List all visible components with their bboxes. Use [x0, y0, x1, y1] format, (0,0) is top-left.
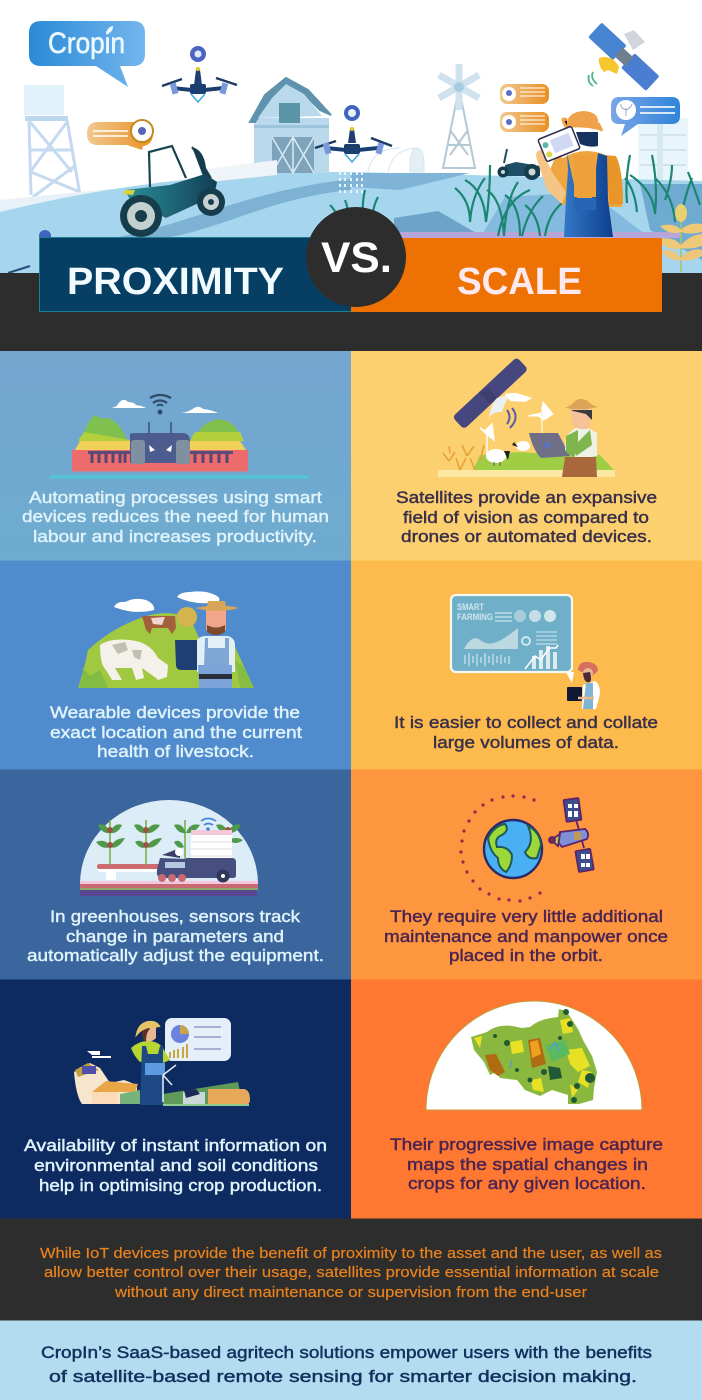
text: conclusion [41, 1343, 652, 1386]
text: maintenance: They require very little additional [390, 907, 663, 926]
plants [330, 155, 700, 236]
text: availability: Availability of instant information on [24, 1136, 327, 1155]
text: greenhouses [27, 907, 324, 965]
text: satellites: field of vision as compared to [403, 508, 649, 527]
panel: scale 3 [351, 770, 702, 980]
icon: farmer with cows [78, 591, 254, 688]
heading: scale: SCALE [457, 261, 582, 303]
panel: scale 4 [351, 980, 702, 1218]
text: availability [24, 1136, 327, 1195]
callout: water card [500, 112, 549, 132]
banner: scale [351, 238, 662, 312]
text: collate: It is easier to collect and collate [394, 713, 658, 732]
hills [0, 172, 702, 275]
text: wearable: exact location and the current [50, 723, 302, 742]
vs badge [306, 207, 406, 307]
text: automating [22, 488, 329, 546]
panel: summary [0, 1218, 702, 1320]
text: conclusion: CropIn’s SaaS-based agritech solutions empower users with the benefits [41, 1343, 652, 1362]
icon: tractor [120, 146, 225, 237]
icon: farmer with tablet [536, 111, 623, 237]
icon: satellite [588, 22, 660, 91]
icon: earth and satellite [459, 794, 594, 903]
text: image capture: Their progressive image capture [390, 1135, 663, 1154]
panel: proximity 2 [0, 560, 351, 770]
icon: satellite with farmer [438, 357, 615, 477]
text: greenhouses: change in parameters and [66, 927, 284, 946]
text: summary [40, 1245, 662, 1301]
text: satellites [396, 488, 657, 546]
text: wearable [50, 703, 302, 761]
vs badge: VS. [321, 234, 392, 282]
icon: far silo [638, 118, 688, 183]
panel: proximity 1 [0, 351, 351, 560]
panel: conclusion [0, 1320, 702, 1400]
text: maintenance [384, 907, 668, 965]
icon: smart farming dashboard: SMART [457, 602, 484, 612]
text: summary: While IoT devices provide the benefit of proximity to the asset and the user, as well as [40, 1245, 662, 1262]
text: wearable: Wearable devices provide the [50, 703, 300, 722]
icon: greenhouse robot [80, 800, 258, 896]
fence [0, 160, 276, 214]
banner: proximity [40, 238, 352, 312]
icon: smart farming dashboard: FARMING [457, 612, 493, 622]
panel: proximity 3 [0, 770, 351, 980]
dark band behind banner [0, 273, 702, 351]
text: collate: large volumes of data. [433, 733, 619, 752]
text: automating: devices reduces the need for human [22, 507, 329, 526]
callout: tractor location [87, 120, 153, 150]
icon: logo bubble [29, 21, 145, 87]
icon: crop map dome [426, 1001, 642, 1110]
text: conclusion: of satellite-based remote sensing for smarter decision making. [49, 1367, 637, 1386]
panel: scale 1 [351, 351, 702, 560]
text: collate [394, 713, 658, 752]
panel: proximity 4 [0, 980, 351, 1218]
text: maintenance: placed in the orbit. [449, 946, 603, 965]
icon: greenhouse [368, 148, 424, 172]
icon: autonomous tractor [50, 395, 308, 478]
text: availability: environmental and soil conditions [34, 1156, 318, 1175]
heading: proximity: PROXIMITY [67, 261, 284, 303]
text: satellites: Satellites provide an expansive [396, 488, 657, 507]
icon: barn [200, 78, 331, 183]
icon: windmill [439, 64, 479, 168]
text: summary: without any direct maintenance or supervision from the end-user [114, 1284, 587, 1301]
icon: distant tractor [498, 149, 540, 180]
text: maintenance: maintenance and manpower once [384, 927, 668, 946]
header scene [0, 0, 702, 275]
text: image capture [390, 1135, 663, 1193]
icon: farmer with dashboard [74, 1018, 250, 1106]
panel: scale 2 [351, 560, 702, 770]
icon: logo bubble: Cropin [48, 27, 125, 60]
icon: drone 2 [315, 105, 392, 195]
icon: small left drone [8, 230, 51, 273]
text: automating: labour and increases productivity. [33, 527, 317, 546]
text: image capture: crops for any given location. [408, 1174, 646, 1193]
callout: location card [500, 84, 549, 104]
text: satellites: drones or automated devices. [401, 527, 652, 546]
callout: plant bubble [611, 97, 680, 136]
icon: smart farming dashboard [451, 595, 600, 709]
icon: water tower [24, 85, 80, 197]
text: greenhouses: automatically adjust the equipment. [27, 946, 324, 965]
text: automating: Automating processes using smart [29, 488, 322, 507]
text: wearable: health of livestock. [97, 742, 254, 761]
text: summary: allow better control over their usage, satellites provide essential information at scale [44, 1264, 659, 1281]
text: greenhouses: In greenhouses, sensors track [50, 907, 301, 926]
text: availability: help in optimising crop production. [39, 1176, 322, 1195]
icon: drone 1 [162, 46, 237, 102]
icon: wheat [658, 204, 702, 272]
text: image capture: maps the spatial changes in [407, 1155, 648, 1174]
